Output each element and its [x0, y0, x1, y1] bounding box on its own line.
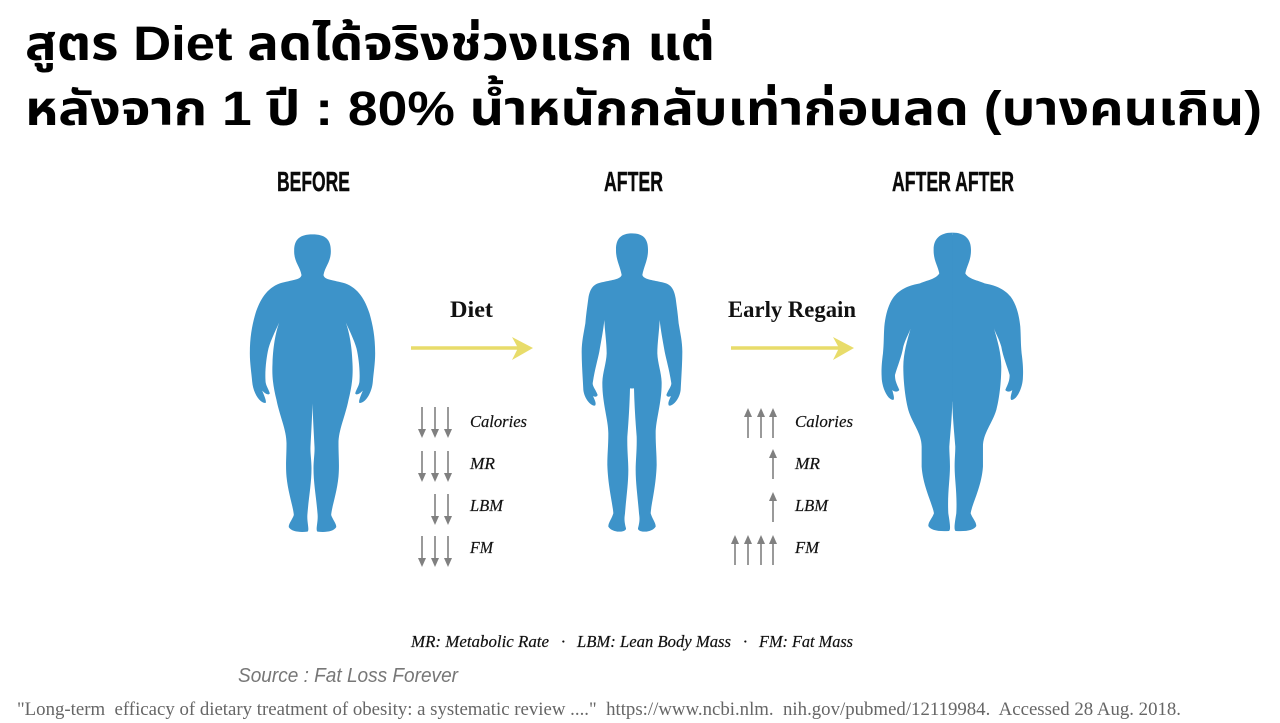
title [25, 18, 1262, 136]
legend: · [743, 632, 747, 651]
figure: before body [250, 234, 375, 532]
arrow: diet [411, 337, 533, 360]
diet arrows: down [418, 407, 452, 567]
figure: after body [582, 233, 682, 532]
regain labels: Calories [795, 412, 853, 431]
regain labels [794, 412, 853, 557]
heading: after: AFTER [604, 166, 663, 197]
citation: "Long-term efficacy of dietary treatment of obesity: a systematic review ...." https://www.ncbi.nlm. nih.gov/pubmed/12119984. Accessed 28 Aug. 2018. [17, 700, 1181, 720]
title: สูตร Diet ลดได้จริงช่วงแรก แต่ [25, 18, 715, 73]
diet labels [469, 412, 527, 557]
heading: after after: AFTER AFTER [892, 166, 1014, 197]
legend: LBM: Lean Body Mass [576, 632, 731, 651]
legend: MR: Metabolic Rate [410, 632, 549, 651]
diet labels: MR [469, 454, 496, 473]
heading: before: BEFORE [277, 166, 350, 197]
diet labels: Calories [470, 412, 527, 431]
regain arrows: up [731, 408, 777, 565]
legend: · [561, 632, 565, 651]
regain labels: FM [794, 538, 820, 557]
figure: after after body [882, 233, 1023, 531]
arrow: early regain [731, 337, 854, 360]
diet labels: LBM [469, 496, 504, 515]
legend [410, 632, 853, 651]
regain labels: LBM [794, 496, 829, 515]
legend: FM: Fat Mass [758, 632, 853, 651]
regain labels: MR [794, 454, 821, 473]
source note: Source : Fat Loss Forever [238, 665, 459, 687]
title: หลังจาก 1 ปี : 80% น้ำหนักกลับเท่าก่อนลด (บางคนเกิน) [25, 75, 1262, 136]
label: early regain: Early Regain [728, 297, 856, 322]
diet labels: FM [469, 538, 494, 557]
label: diet: Diet [450, 297, 493, 322]
